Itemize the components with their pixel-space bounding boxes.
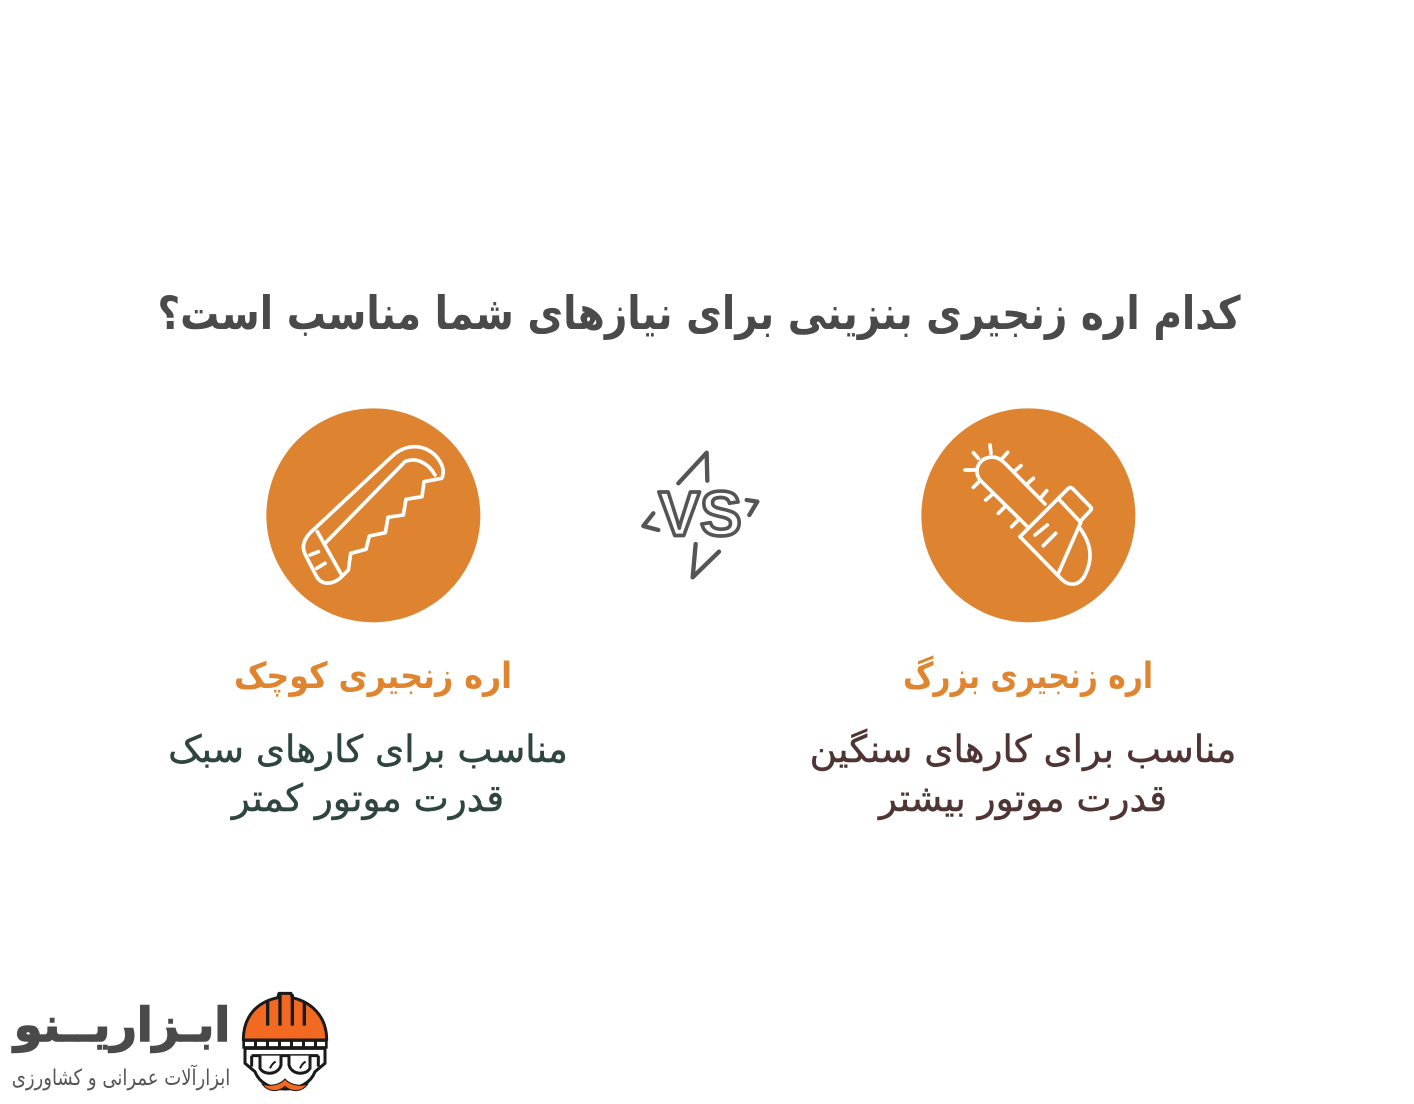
text: large chainsaw description bbox=[810, 727, 1236, 820]
text: small chainsaw description: قدرت موتور کمتر bbox=[232, 776, 504, 820]
logo mascot helmet bbox=[242, 992, 328, 1092]
icon: chainsaw in orange circle bbox=[921, 408, 1136, 622]
icon: hand saw in orange circle bbox=[266, 408, 480, 622]
logo bbox=[11, 992, 328, 1092]
title: کدام اره زنجیری بنزینی برای نیازهای شما مناسب است؟ bbox=[157, 286, 1241, 340]
logo wordmark: ابـزاریــنو bbox=[14, 998, 230, 1053]
icon: VS lightning: VS bbox=[658, 480, 742, 550]
text: small chainsaw description: مناسب برای کارهای سبک bbox=[168, 727, 568, 771]
text: large chainsaw description: قدرت موتور بیشتر bbox=[879, 776, 1167, 820]
logo tagline: ابزارآلات عمرانی و کشاورزی bbox=[12, 1066, 230, 1091]
icon: VS lightning bbox=[641, 450, 760, 580]
heading: small chainsaw: اره زنجیری کوچک bbox=[234, 656, 512, 697]
heading: large chainsaw: اره زنجیری بزرگ bbox=[903, 656, 1153, 697]
text: small chainsaw description bbox=[168, 727, 568, 820]
text: large chainsaw description: مناسب برای کارهای سنگین bbox=[810, 727, 1236, 771]
